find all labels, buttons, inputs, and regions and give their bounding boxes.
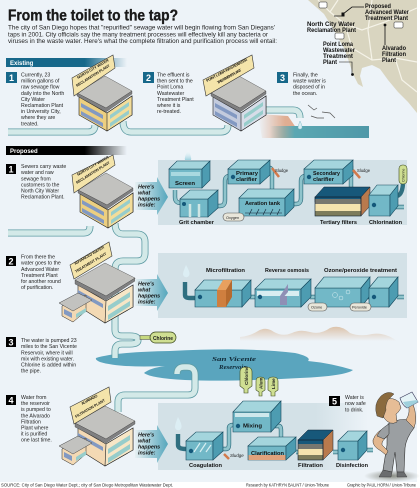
step 1 proposed: 1 xyxy=(8,164,14,174)
step 1 existing: Currently, 23 xyxy=(21,72,50,78)
tank: aeration tank: Aeration tank xyxy=(245,201,281,207)
step 3 proposed: 3 xyxy=(8,338,14,348)
step 2 existing: where it is xyxy=(157,103,181,109)
source credit: SOURCE: City of San Diego Water Dept.; city of San Diego Metropolitan Wastewater Dept. xyxy=(1,482,173,488)
tank: filtration xyxy=(298,430,333,460)
map: San Diego plant locations xyxy=(307,0,417,113)
step 1 existing: raw sewage flow xyxy=(21,85,60,91)
map label: Point Loma: Point Loma xyxy=(323,42,354,48)
step 4 proposed: it is purified xyxy=(21,432,47,438)
intro text: viruses in the waste water. Here's what the complete filtration and purification process will entail: xyxy=(8,39,277,45)
step 1 existing: City Water xyxy=(21,97,45,103)
map label: Proposed Advanced Water: Treatment Plant xyxy=(365,16,408,22)
person drinking water xyxy=(364,392,420,482)
peroxide pill xyxy=(350,303,371,311)
map label: Point Loma xyxy=(323,42,356,76)
step 3 proposed: mix with existing water. xyxy=(21,356,74,362)
step 2 existing: The effluent is xyxy=(157,72,190,78)
step 1 existing: 1 xyxy=(9,73,14,83)
step 3 proposed xyxy=(6,337,77,375)
tank: reverse osmosis xyxy=(255,279,311,307)
step 3 existing: Finally, the xyxy=(293,72,318,78)
map label: North City: Reclamation Plant xyxy=(307,28,356,34)
bottle: lime: Lime xyxy=(271,378,276,389)
panel: Advanced Water process xyxy=(158,253,407,318)
step 3 existing: waste water is xyxy=(293,79,326,85)
step 2 existing: Treatment Plant xyxy=(157,97,194,103)
tank: microfiltration xyxy=(195,280,251,307)
tank: clarification: Clarification xyxy=(251,451,285,457)
sludge 1 xyxy=(272,168,289,177)
bottle: alum xyxy=(256,377,265,396)
ozone pill: Ozone xyxy=(311,306,322,310)
map label: Alvarado: Alvarado xyxy=(382,46,406,52)
reservoir: Reservoir xyxy=(218,364,246,371)
step 2 existing: then sent to the xyxy=(157,79,193,85)
arrow: here's what happens inside 3: what xyxy=(138,438,150,444)
tank: secondary clarifier xyxy=(304,160,353,184)
step 1 existing xyxy=(6,72,64,127)
step 2 existing: 2 xyxy=(146,73,151,83)
step 3 proposed: the pipe. xyxy=(21,369,41,375)
section band: Proposed: Proposed xyxy=(10,149,38,155)
step 2 proposed: of purification. xyxy=(21,285,53,291)
intro text: taps in 2001. City officials say the many treatment processes will effectively kill any bacteria or xyxy=(8,32,268,38)
research credit: Research by KATHRYN BALINT / Union-Tribune xyxy=(246,482,330,488)
arrow: here's what happens inside 1: what xyxy=(138,190,150,196)
sign xyxy=(72,155,115,193)
tank: clarification xyxy=(248,437,296,460)
tank: primary clarifier: Primary xyxy=(236,171,259,177)
panel: North City process xyxy=(158,160,407,225)
section band: Existing xyxy=(6,58,127,67)
step 2 proposed xyxy=(6,254,61,291)
bottle: chlorine xyxy=(240,366,252,393)
map label: Proposed Advanced Water: Advanced Water xyxy=(365,10,410,16)
tank: tertiary filters xyxy=(315,187,370,216)
sign: FILTRATION PLANT xyxy=(74,398,107,419)
tank: disinfection xyxy=(338,431,367,460)
step 1 proposed: sewage from xyxy=(21,176,51,182)
arrow: here's what happens inside 1: Here's xyxy=(138,184,154,190)
tank: primary clarifier xyxy=(228,160,270,184)
label: Reverse osmosis xyxy=(265,268,309,274)
birds xyxy=(308,105,335,118)
reservoir: San Vicente xyxy=(212,356,256,363)
beach xyxy=(258,114,303,138)
drop, panel 3 xyxy=(175,417,182,430)
tank: coagulation xyxy=(186,432,223,460)
step 1 existing: Reclamation Plant xyxy=(21,103,64,109)
sign xyxy=(72,55,115,96)
intro text xyxy=(8,26,277,45)
map label: Point Loma: Wastewater xyxy=(323,48,356,54)
sign: RECLAMATION PLANT xyxy=(75,63,111,88)
arrow: here's what happens inside 3: Here's xyxy=(138,432,154,438)
step 3 existing: 3 xyxy=(280,73,285,83)
tank: aeration tank xyxy=(239,189,294,216)
drop, panel 2 xyxy=(183,265,190,277)
map highway shields xyxy=(319,2,403,39)
arrow: here's what happens inside 3: inside: xyxy=(138,450,156,456)
map label: Alvarado: Filtration xyxy=(382,52,406,58)
step 1 existing: where they are xyxy=(21,115,55,121)
step 1 proposed: Reclamation Plant. xyxy=(21,195,65,201)
sludge 3 xyxy=(224,453,244,459)
sign: NORTH CITY WATER xyxy=(76,58,110,80)
step 2 proposed: water goes to the xyxy=(21,261,61,267)
building: Point Loma Wastewater Treatment Plant xyxy=(203,55,266,131)
step 2 proposed: for another round xyxy=(21,279,61,285)
step 4 proposed: is pumped to xyxy=(21,407,51,413)
map label: Proposed Advanced Water: Proposed xyxy=(365,4,391,10)
chlorine capsule: Chlorine xyxy=(402,169,406,182)
tank: grit chamber xyxy=(180,190,218,217)
arrow: here's what happens inside 2: inside: xyxy=(138,300,156,306)
sign: ADVANCED WATER xyxy=(74,245,105,266)
label: Tertiary filters xyxy=(320,220,357,226)
step 2 existing: Wastewater xyxy=(157,91,184,97)
sign: ALVARADO xyxy=(81,394,98,406)
building: North City Water Reclamation Plant (existing) xyxy=(72,55,132,131)
arrow: here's what happens inside 1: happens xyxy=(138,196,160,202)
step 2 existing xyxy=(143,72,194,115)
chlorine pipe capsule: Chlorine xyxy=(153,336,173,342)
building: Advanced Water Treatment Plant xyxy=(59,242,135,323)
ozone pill xyxy=(308,303,327,311)
building: North City plant (proposed) xyxy=(72,155,133,228)
label: Filtration xyxy=(298,463,324,469)
step 4 proposed xyxy=(6,395,52,444)
tank: ozone stage xyxy=(315,277,370,307)
sign xyxy=(70,242,112,279)
arrow: here's what happens inside 2: what xyxy=(138,288,150,294)
tank: mixing: Mixing xyxy=(243,424,263,430)
proposed pipes xyxy=(8,223,195,412)
peroxide pill: Peroxide xyxy=(352,306,367,310)
map label: North City: North City Water xyxy=(307,22,356,28)
bottle: chlorine: Chlorine xyxy=(244,366,249,385)
label: Coagulation xyxy=(189,463,223,469)
step 3 existing: disposed of in xyxy=(293,85,325,91)
outfall pipe and drop xyxy=(266,110,302,129)
step 3 proposed: Chlorine is added within xyxy=(21,363,76,369)
oxygen pill xyxy=(223,213,244,221)
step 3 proposed: Reservoir, where it will xyxy=(21,350,73,356)
arrow: here's what happens inside 2: Here's xyxy=(138,282,154,288)
label: Ozone/peroxide treatment xyxy=(324,268,397,274)
step 5 proposed xyxy=(329,395,366,413)
map label: Point Loma: Treatment xyxy=(323,54,353,60)
step 4 proposed: 4 xyxy=(8,396,14,406)
title: From the toilet to the tap? xyxy=(8,8,178,24)
step 1 existing: daily into the North xyxy=(21,91,64,97)
sign: POINT LOMA WASTEWATER xyxy=(206,58,248,83)
intro text: The city of San Diego hopes that "repurified" sewage water will begin flowing from San Diegans' xyxy=(8,26,275,32)
reservoir xyxy=(96,349,353,381)
step 2 proposed: 2 xyxy=(8,256,14,266)
sludge 1: Sludge xyxy=(275,168,289,173)
map label: Alvarado: Plant xyxy=(382,58,396,64)
label: Grit chamber xyxy=(179,220,215,226)
sign xyxy=(203,55,254,96)
step 5 proposed: 5 xyxy=(332,396,337,406)
step 3 existing xyxy=(277,72,326,97)
sign: NORTH CITY WATER xyxy=(76,155,110,177)
sign: TREATMENT PLANT xyxy=(74,252,108,274)
step 1 proposed: Sewers carry waste xyxy=(21,164,66,170)
step 1 proposed: customers to the xyxy=(21,182,59,188)
connecting process pipes, panel 1 xyxy=(175,168,404,207)
tank: mixing xyxy=(233,401,281,432)
chlorine capsule xyxy=(399,165,407,184)
hills xyxy=(240,327,397,341)
arrow: here's what happens inside 2: happens xyxy=(138,294,160,300)
existing pipes xyxy=(8,121,228,132)
map label: North City xyxy=(307,7,364,34)
tank: secondary clarifier: Secondary xyxy=(313,171,341,177)
ocean xyxy=(270,126,369,138)
step 1 proposed: North City Water xyxy=(21,189,59,195)
label: Microfiltration xyxy=(206,268,246,274)
map label: Alvarado xyxy=(382,24,406,64)
step 4 proposed: Plant where xyxy=(21,426,49,432)
sign xyxy=(70,387,111,424)
step 2 proposed: Treatment Plant xyxy=(21,273,58,279)
step 3 proposed: The water is pumped 23 xyxy=(21,338,77,344)
step 2 existing: Point Loma xyxy=(157,85,183,91)
panel: Alvarado process xyxy=(158,403,368,470)
oxygen pill: Oxygen xyxy=(226,216,239,220)
chlorine pipe capsule xyxy=(140,332,176,343)
step 5 proposed: now safe xyxy=(345,401,366,407)
label: Chlorination xyxy=(369,220,403,226)
tank: screen: Screen xyxy=(175,181,196,187)
inlet drop, panel 1 xyxy=(185,150,191,160)
section band: Existing: Existing xyxy=(10,61,34,67)
sludge 2: Sludge xyxy=(357,168,371,173)
process pipes, panel 2 xyxy=(185,282,404,298)
step 3 existing: the ocean. xyxy=(293,91,317,97)
step 1 existing: treated. xyxy=(21,121,39,127)
arrow: here's what happens inside 3 xyxy=(135,425,168,463)
arrow: here's what happens inside 1 xyxy=(135,177,168,215)
step 4 proposed: Filtration xyxy=(21,419,41,425)
step 4 proposed: one last time. xyxy=(21,438,52,444)
tank: primary clarifier: clarifier xyxy=(236,177,258,183)
map label: Point Loma: Plant xyxy=(323,60,337,66)
tank: peroxide stage xyxy=(369,277,398,307)
step 4 proposed: the reservoir xyxy=(21,401,50,407)
step 2 proposed: Advanced Water xyxy=(21,267,59,273)
label: Disinfection xyxy=(336,463,369,469)
map label: Proposed Advanced Water xyxy=(365,4,410,22)
section band: Proposed xyxy=(6,146,127,155)
step 1 proposed: water and raw xyxy=(21,170,54,176)
step 4 proposed: the Alvarado xyxy=(21,413,50,419)
sign: RECLAMATION PLANT xyxy=(75,160,111,185)
process pipes, panel 3 xyxy=(178,425,373,452)
step 5 proposed: Water is xyxy=(345,395,364,401)
sign: TREATMENT PLANT xyxy=(217,68,243,85)
arrow: here's what happens inside 3: happens xyxy=(138,444,160,450)
bottle: alum: Alum xyxy=(258,378,264,389)
tank: chlorination xyxy=(369,185,398,216)
tank: screen xyxy=(169,161,210,188)
arrow: here's what happens inside 2 xyxy=(135,274,168,311)
step 4 proposed: Water from xyxy=(21,395,46,401)
bottle: lime xyxy=(268,377,278,396)
step 1 existing: in University City, xyxy=(21,109,61,115)
step 3 proposed: miles to the San Vicente xyxy=(21,344,77,350)
tank: secondary clarifier: clarifier xyxy=(313,177,335,183)
step 5 proposed: to drink. xyxy=(345,407,363,413)
arrow: here's what happens inside 1: inside: xyxy=(138,202,156,208)
sludge 3: Sludge xyxy=(230,453,244,458)
building: Alvarado Filtration Plant xyxy=(59,387,135,466)
step 1 existing: million gallons of xyxy=(21,79,60,85)
step 2 proposed: From there the xyxy=(21,254,55,260)
sludge 2 xyxy=(353,168,371,178)
step 2 existing: re-treated. xyxy=(157,109,181,115)
step 1 proposed xyxy=(6,164,66,201)
